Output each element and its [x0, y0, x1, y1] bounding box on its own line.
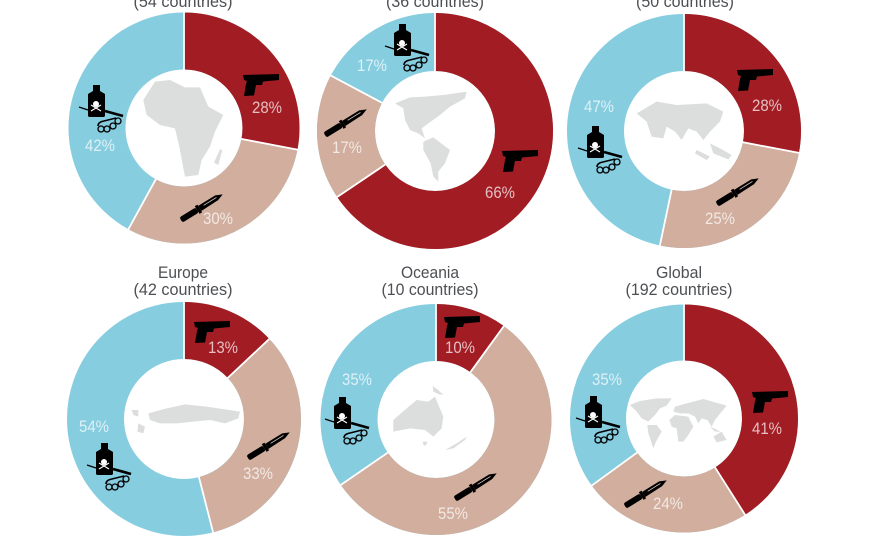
value: 28%: 28%: [752, 97, 782, 115]
icon: handgun: [737, 69, 773, 91]
value: 24%: 24%: [653, 495, 683, 513]
icon: knife: [246, 428, 292, 462]
segment: sharp objects 24%: [598, 332, 770, 504]
map: Europe: [132, 404, 240, 433]
map: Asia: [637, 102, 732, 160]
segment: other 17%: [346, 42, 524, 220]
value: 17% sharp objects: 17%: [332, 139, 362, 157]
donut panel: second region (36 countries): [323, 0, 538, 220]
segment: firearms 28%: [596, 42, 772, 220]
icon: knife: [623, 476, 669, 510]
segment: firearms 28%: [97, 41, 271, 215]
map: world: [630, 398, 727, 448]
segment: sharp objects 25%: [596, 42, 772, 220]
map: Americas: [395, 92, 467, 182]
value: 30%: 30%: [203, 210, 233, 228]
value: 25%: 25%: [705, 210, 735, 228]
heading: 10 countries: (10 countries): [382, 281, 478, 299]
value: 41%: 41%: [752, 420, 782, 438]
value: 10%: 10%: [445, 339, 475, 357]
donut panel: first region (54 countries): [79, 0, 298, 230]
icon: poison and knuckles: [578, 126, 622, 173]
value: 17% other: 17%: [357, 57, 387, 75]
segment: other 47%: [596, 42, 772, 220]
heading: Global: Global: [656, 264, 702, 282]
value: 28%: 28%: [252, 99, 282, 117]
icon: poison and knuckles: [87, 443, 131, 490]
value: 13%: 13%: [208, 339, 238, 357]
donut panel: Oceania: [325, 264, 523, 523]
icon: knife: [715, 174, 761, 208]
map: Africa: [143, 80, 223, 177]
value: 47%: 47%: [584, 98, 614, 116]
segment: other 35%: [598, 332, 770, 504]
segment: other 35%: [349, 332, 523, 506]
icon: knife: [179, 190, 225, 224]
segment: firearms 66%: [346, 42, 524, 220]
value: 33%: 33%: [243, 465, 273, 483]
icon: poison and knuckles: [385, 24, 429, 71]
icon: poison and knuckles: [79, 85, 123, 132]
segment: firearms 10%: [349, 332, 523, 506]
icon: handgun: [502, 150, 538, 172]
value: 42%: 42%: [85, 137, 115, 155]
heading: 42 countries: (42 countries): [134, 281, 232, 299]
value: 66%: 66%: [485, 184, 515, 202]
value: 35%: 35%: [592, 371, 622, 389]
segment: sharp objects 55%: [349, 332, 523, 506]
donut panel: Europe: [79, 264, 292, 532]
icon: handgun: [752, 391, 788, 413]
icon: knife: [453, 469, 499, 503]
icon: poison and knuckles: [576, 396, 620, 443]
segment: firearms 13%: [96, 330, 272, 508]
segment: sharp objects 17%: [346, 42, 524, 220]
segment: sharp objects 33%: [96, 330, 272, 508]
icon: knife: [323, 105, 369, 139]
segment: firearms 41%: [598, 332, 770, 504]
icon: poison and knuckles: [325, 397, 369, 444]
heading: Europe: Europe: [158, 264, 208, 282]
icon: handgun: [444, 316, 480, 338]
heading: 192 countries: (192 countries): [626, 281, 732, 299]
icon: handgun: [243, 74, 279, 96]
heading: Oceania: Oceania: [401, 264, 460, 282]
value: 55%: 55%: [438, 505, 468, 523]
segment: other 54%: [96, 330, 272, 508]
donut panel: Global: [576, 264, 788, 515]
segment: sharp objects 30%: [97, 41, 271, 215]
icon: handgun: [194, 321, 230, 343]
map: Oceania: [393, 386, 467, 450]
value: 54%: 54%: [79, 418, 109, 436]
value: 35%: 35%: [342, 371, 372, 389]
segment: other 42%: [97, 41, 271, 215]
donut panel: third region (50 countries): [578, 0, 799, 245]
